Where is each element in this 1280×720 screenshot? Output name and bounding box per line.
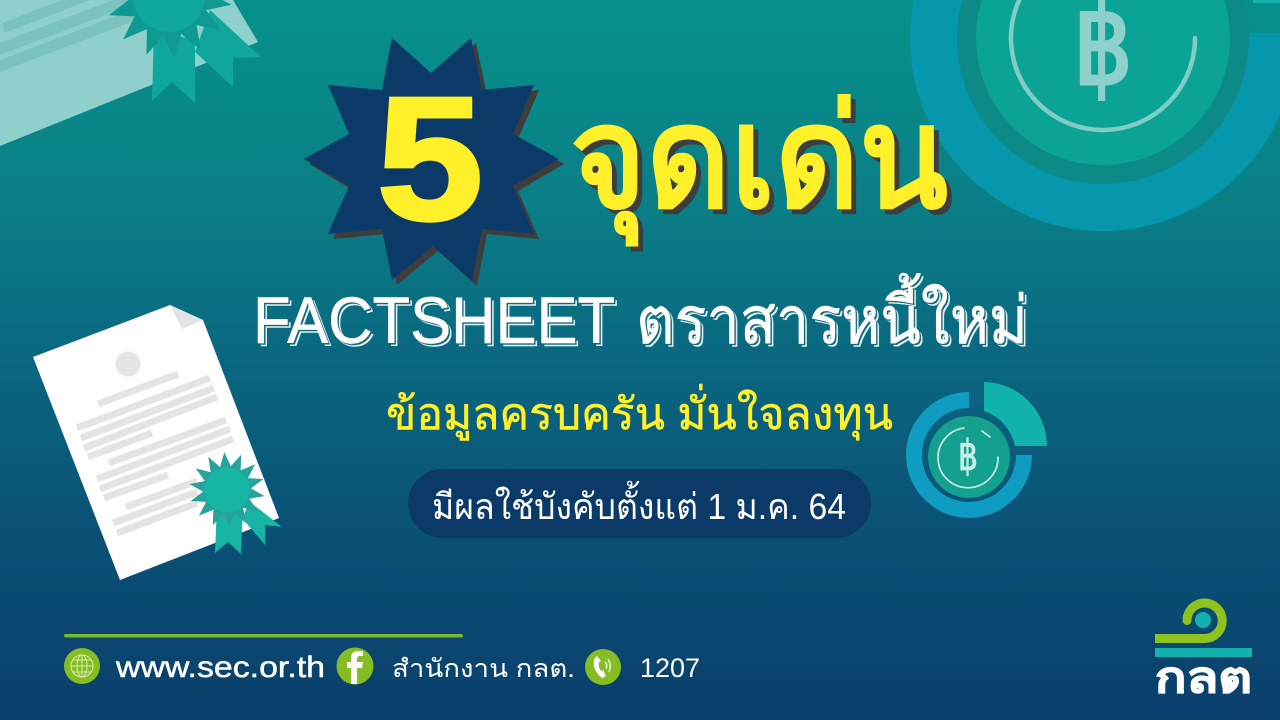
pill xyxy=(408,469,871,538)
logo dot xyxy=(1195,612,1211,628)
phone number: 1207 xyxy=(640,653,700,683)
star badge xyxy=(304,38,564,286)
arc xyxy=(938,428,998,488)
star shadow xyxy=(309,43,564,286)
seal circle xyxy=(116,352,140,376)
website: www.sec.or.th xyxy=(115,651,325,684)
SEC logo xyxy=(1155,603,1252,701)
logo spiral xyxy=(1187,603,1222,638)
number 5: 5 xyxy=(377,62,483,257)
pie slice xyxy=(984,382,1047,446)
document lines xyxy=(77,374,233,533)
ring xyxy=(906,392,1032,518)
tagline: ข้อมูลครบครัน มั่นใจลงทุน xyxy=(386,383,893,441)
certificate paper xyxy=(0,0,258,146)
page fold xyxy=(170,305,203,329)
coin arc xyxy=(1011,0,1195,130)
certificate text lines xyxy=(0,0,190,72)
paper xyxy=(33,305,279,580)
factsheet thai: ตราสารหนี้ใหม่ xyxy=(636,273,1028,357)
logo text: กลต xyxy=(1155,654,1252,701)
logo band xyxy=(1155,634,1205,643)
facebook name: สำนักงาน กลต. xyxy=(392,655,575,683)
certificate: top left xyxy=(0,0,261,146)
icon: phone xyxy=(585,649,621,685)
document illustration xyxy=(33,305,282,580)
footer contact bar xyxy=(64,634,700,685)
factsheet latin: FACTSHEET xyxy=(253,283,615,357)
disc xyxy=(928,416,1010,498)
certificate rosette xyxy=(98,0,261,103)
logo bar xyxy=(1155,648,1252,657)
pill text: มีผลใช้บังคับตั้งแต่ 1 ม.ค. 64 xyxy=(432,480,846,527)
effective date pill xyxy=(408,469,871,538)
heading: highlights: จุดเด่น xyxy=(570,79,948,247)
baht: ฿ xyxy=(958,432,978,479)
arc tick xyxy=(982,431,990,437)
small coin chart xyxy=(906,382,1047,518)
outer ring xyxy=(910,0,1280,231)
icon: globe xyxy=(64,648,100,684)
subtitle: factsheet xyxy=(253,273,1028,357)
coin disc xyxy=(976,0,1230,165)
rosette xyxy=(184,448,282,554)
icon: facebook xyxy=(336,648,374,684)
footer rule xyxy=(64,634,463,638)
big coin chart: top right xyxy=(910,0,1280,231)
inner dark ring xyxy=(957,0,1249,184)
star xyxy=(304,38,559,281)
pie slice corner xyxy=(1253,0,1280,3)
